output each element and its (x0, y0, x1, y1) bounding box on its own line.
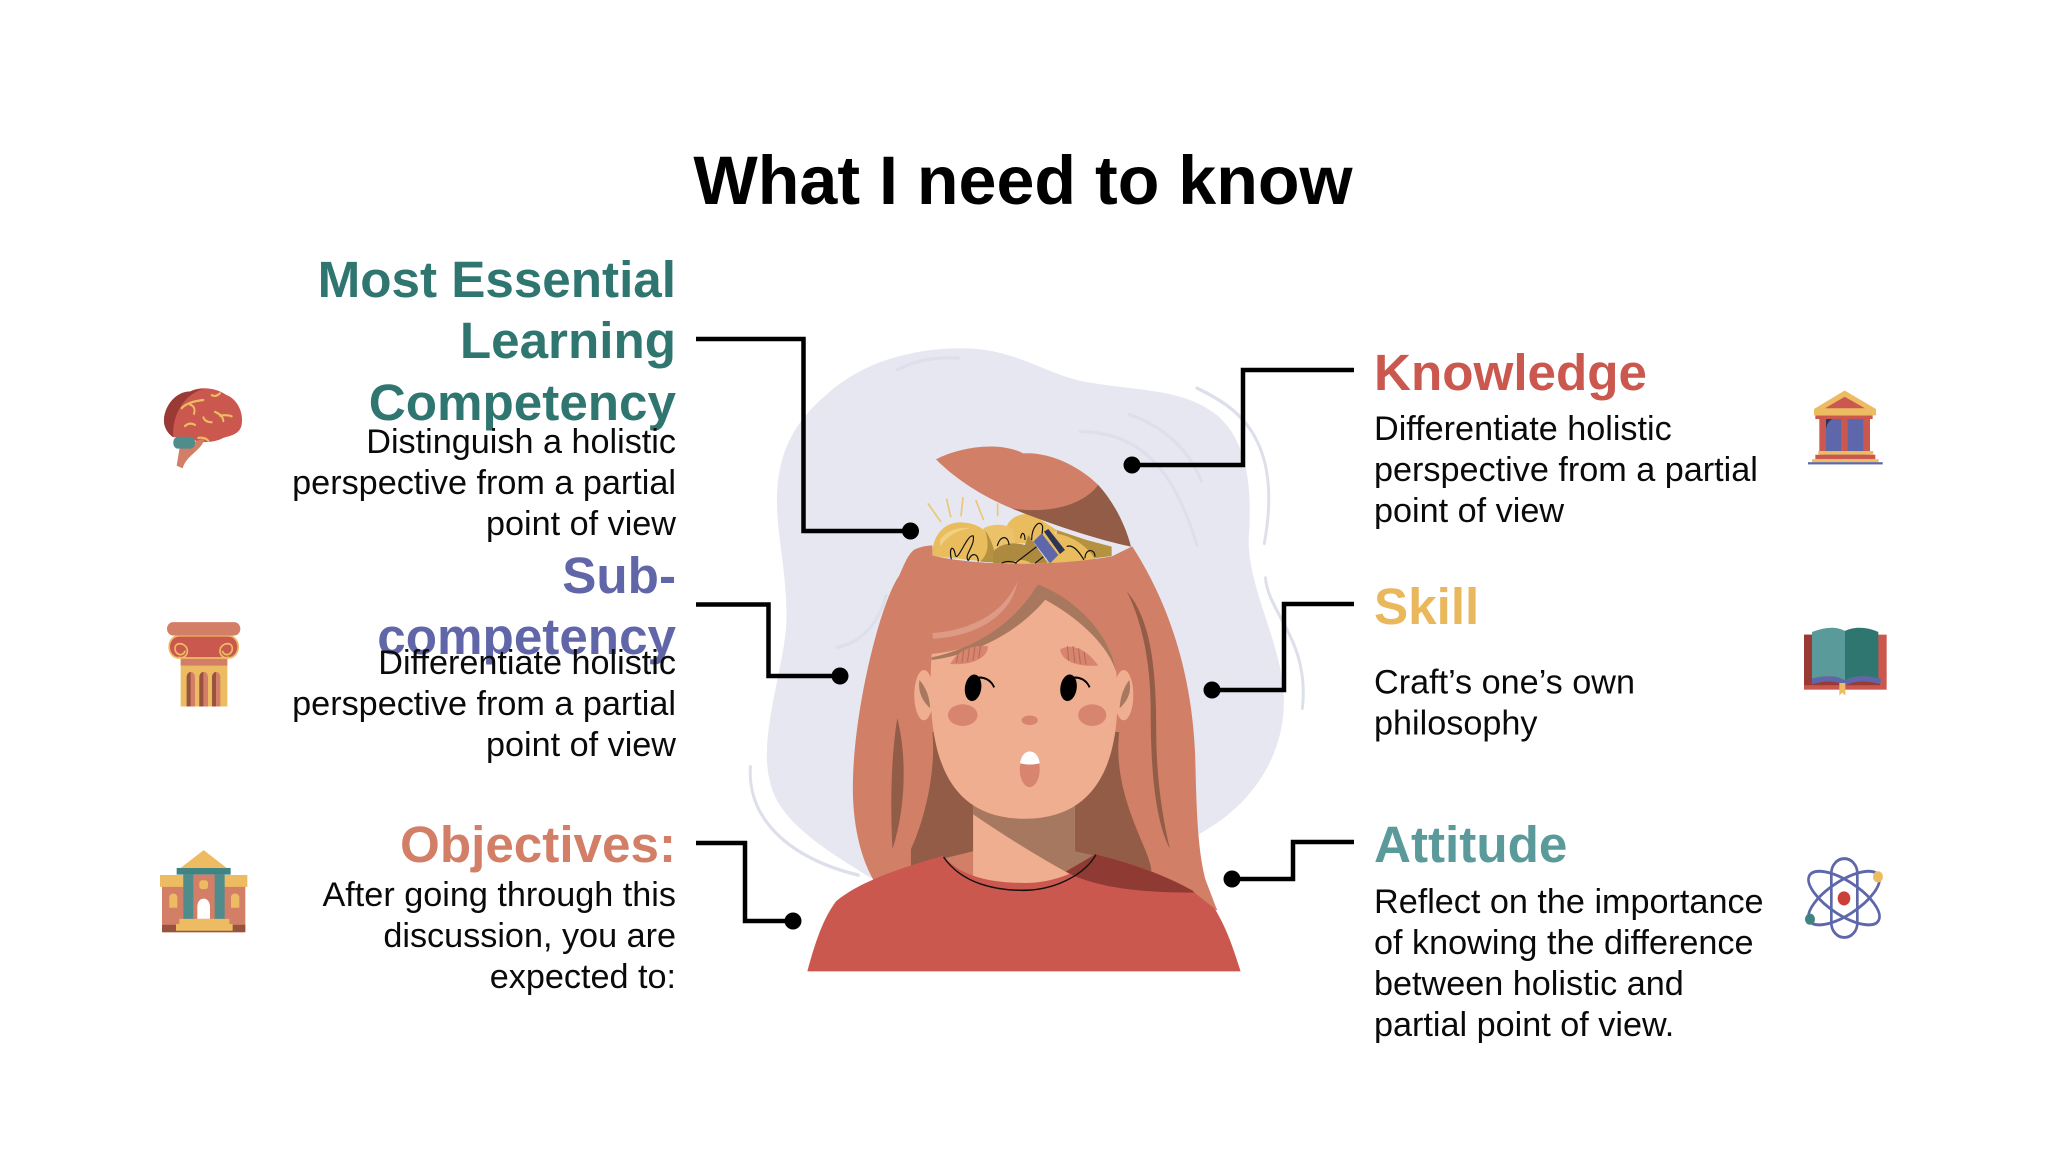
text: skill description: Craft’s one’s own (1374, 664, 1635, 702)
text: skill description (1374, 664, 1635, 742)
connector: Knowledge (1124, 370, 1354, 474)
heading: Most Essential Learning Competency: Competency (369, 374, 677, 431)
neck (973, 797, 1075, 884)
cheeks and nose (948, 704, 978, 726)
icon: column capital (167, 622, 240, 707)
connector: Skill (1204, 604, 1354, 698)
text: sub-competency description (292, 644, 676, 764)
background blob and swooshes (750, 348, 1303, 879)
icon: atom (1802, 859, 1886, 937)
text: knowledge description: Differentiate holistic (1374, 410, 1672, 448)
text: competency description: Distinguish a holistic (366, 423, 676, 461)
eyes (963, 673, 983, 703)
heading: Skill: Skill (1374, 578, 1479, 635)
heading: Objectives: Objectives: (400, 816, 676, 873)
fringe shadow (932, 585, 1116, 672)
shirt shadow (1066, 854, 1196, 893)
heading: Most Essential Learning Competency: Most Essential (318, 251, 676, 308)
text: competency description (292, 423, 676, 543)
hair shadow (911, 732, 1151, 872)
heading: Sub-competency: competency (377, 608, 677, 665)
icon: museum building (160, 850, 247, 932)
text: objectives description: expected to: (490, 958, 676, 996)
text: objectives description (322, 876, 676, 996)
heading: Most Essential Learning Competency: Learning (460, 312, 676, 369)
hair mass (853, 546, 1217, 910)
fringe highlight (932, 582, 1018, 639)
connector: Attitude (1224, 842, 1354, 888)
title: What I need to know (693, 143, 1354, 219)
connector: Most Essential Learning Competency (696, 339, 919, 540)
icon: temple (1808, 390, 1883, 464)
text: sub-competency description: point of view (486, 726, 676, 764)
text: sub-competency description: perspective from a partial (292, 685, 676, 723)
text: objectives description: discussion, you are (383, 917, 676, 955)
connector: Objectives (696, 843, 802, 930)
text: knowledge description: perspective from a partial (1374, 451, 1758, 489)
icon: brain (164, 388, 242, 468)
text: objectives description: After going through this (322, 876, 676, 914)
text: sub-competency description: Differentiate holistic (378, 644, 676, 682)
text: skill description: philosophy (1374, 704, 1538, 742)
text: attitude description: of knowing the difference (1374, 924, 1753, 962)
heading: Sub-competency (377, 547, 677, 665)
mouth (1020, 752, 1040, 787)
face (931, 598, 1117, 819)
collar line (944, 855, 1096, 890)
text: competency description: perspective from a partial (292, 464, 676, 502)
text: attitude description (1374, 883, 1764, 1044)
icon: open book (1804, 628, 1887, 696)
text: knowledge description: point of view (1374, 492, 1564, 530)
text: attitude description: partial point of view. (1374, 1006, 1674, 1044)
brain bulbs (928, 498, 1112, 565)
heading: Knowledge: Knowledge (1374, 344, 1647, 401)
text: attitude description: between holistic and (1374, 965, 1684, 1003)
hair strands (891, 718, 904, 849)
ears (914, 670, 934, 720)
head and hair (807, 546, 1241, 971)
heading: Attitude: Attitude (1374, 816, 1567, 873)
connector: Sub-competency (696, 604, 848, 684)
heading: Most Essential Learning Competency (318, 251, 677, 431)
eyebrows (950, 646, 988, 664)
text: attitude description: Reflect on the importance (1374, 883, 1764, 921)
text: competency description: point of view (486, 505, 676, 543)
flap of head (936, 446, 1131, 547)
illustration: woman with open head (750, 348, 1303, 971)
shirt (807, 854, 1241, 971)
heading: Sub-competency: Sub- (562, 547, 676, 604)
text: knowledge description (1374, 410, 1758, 530)
